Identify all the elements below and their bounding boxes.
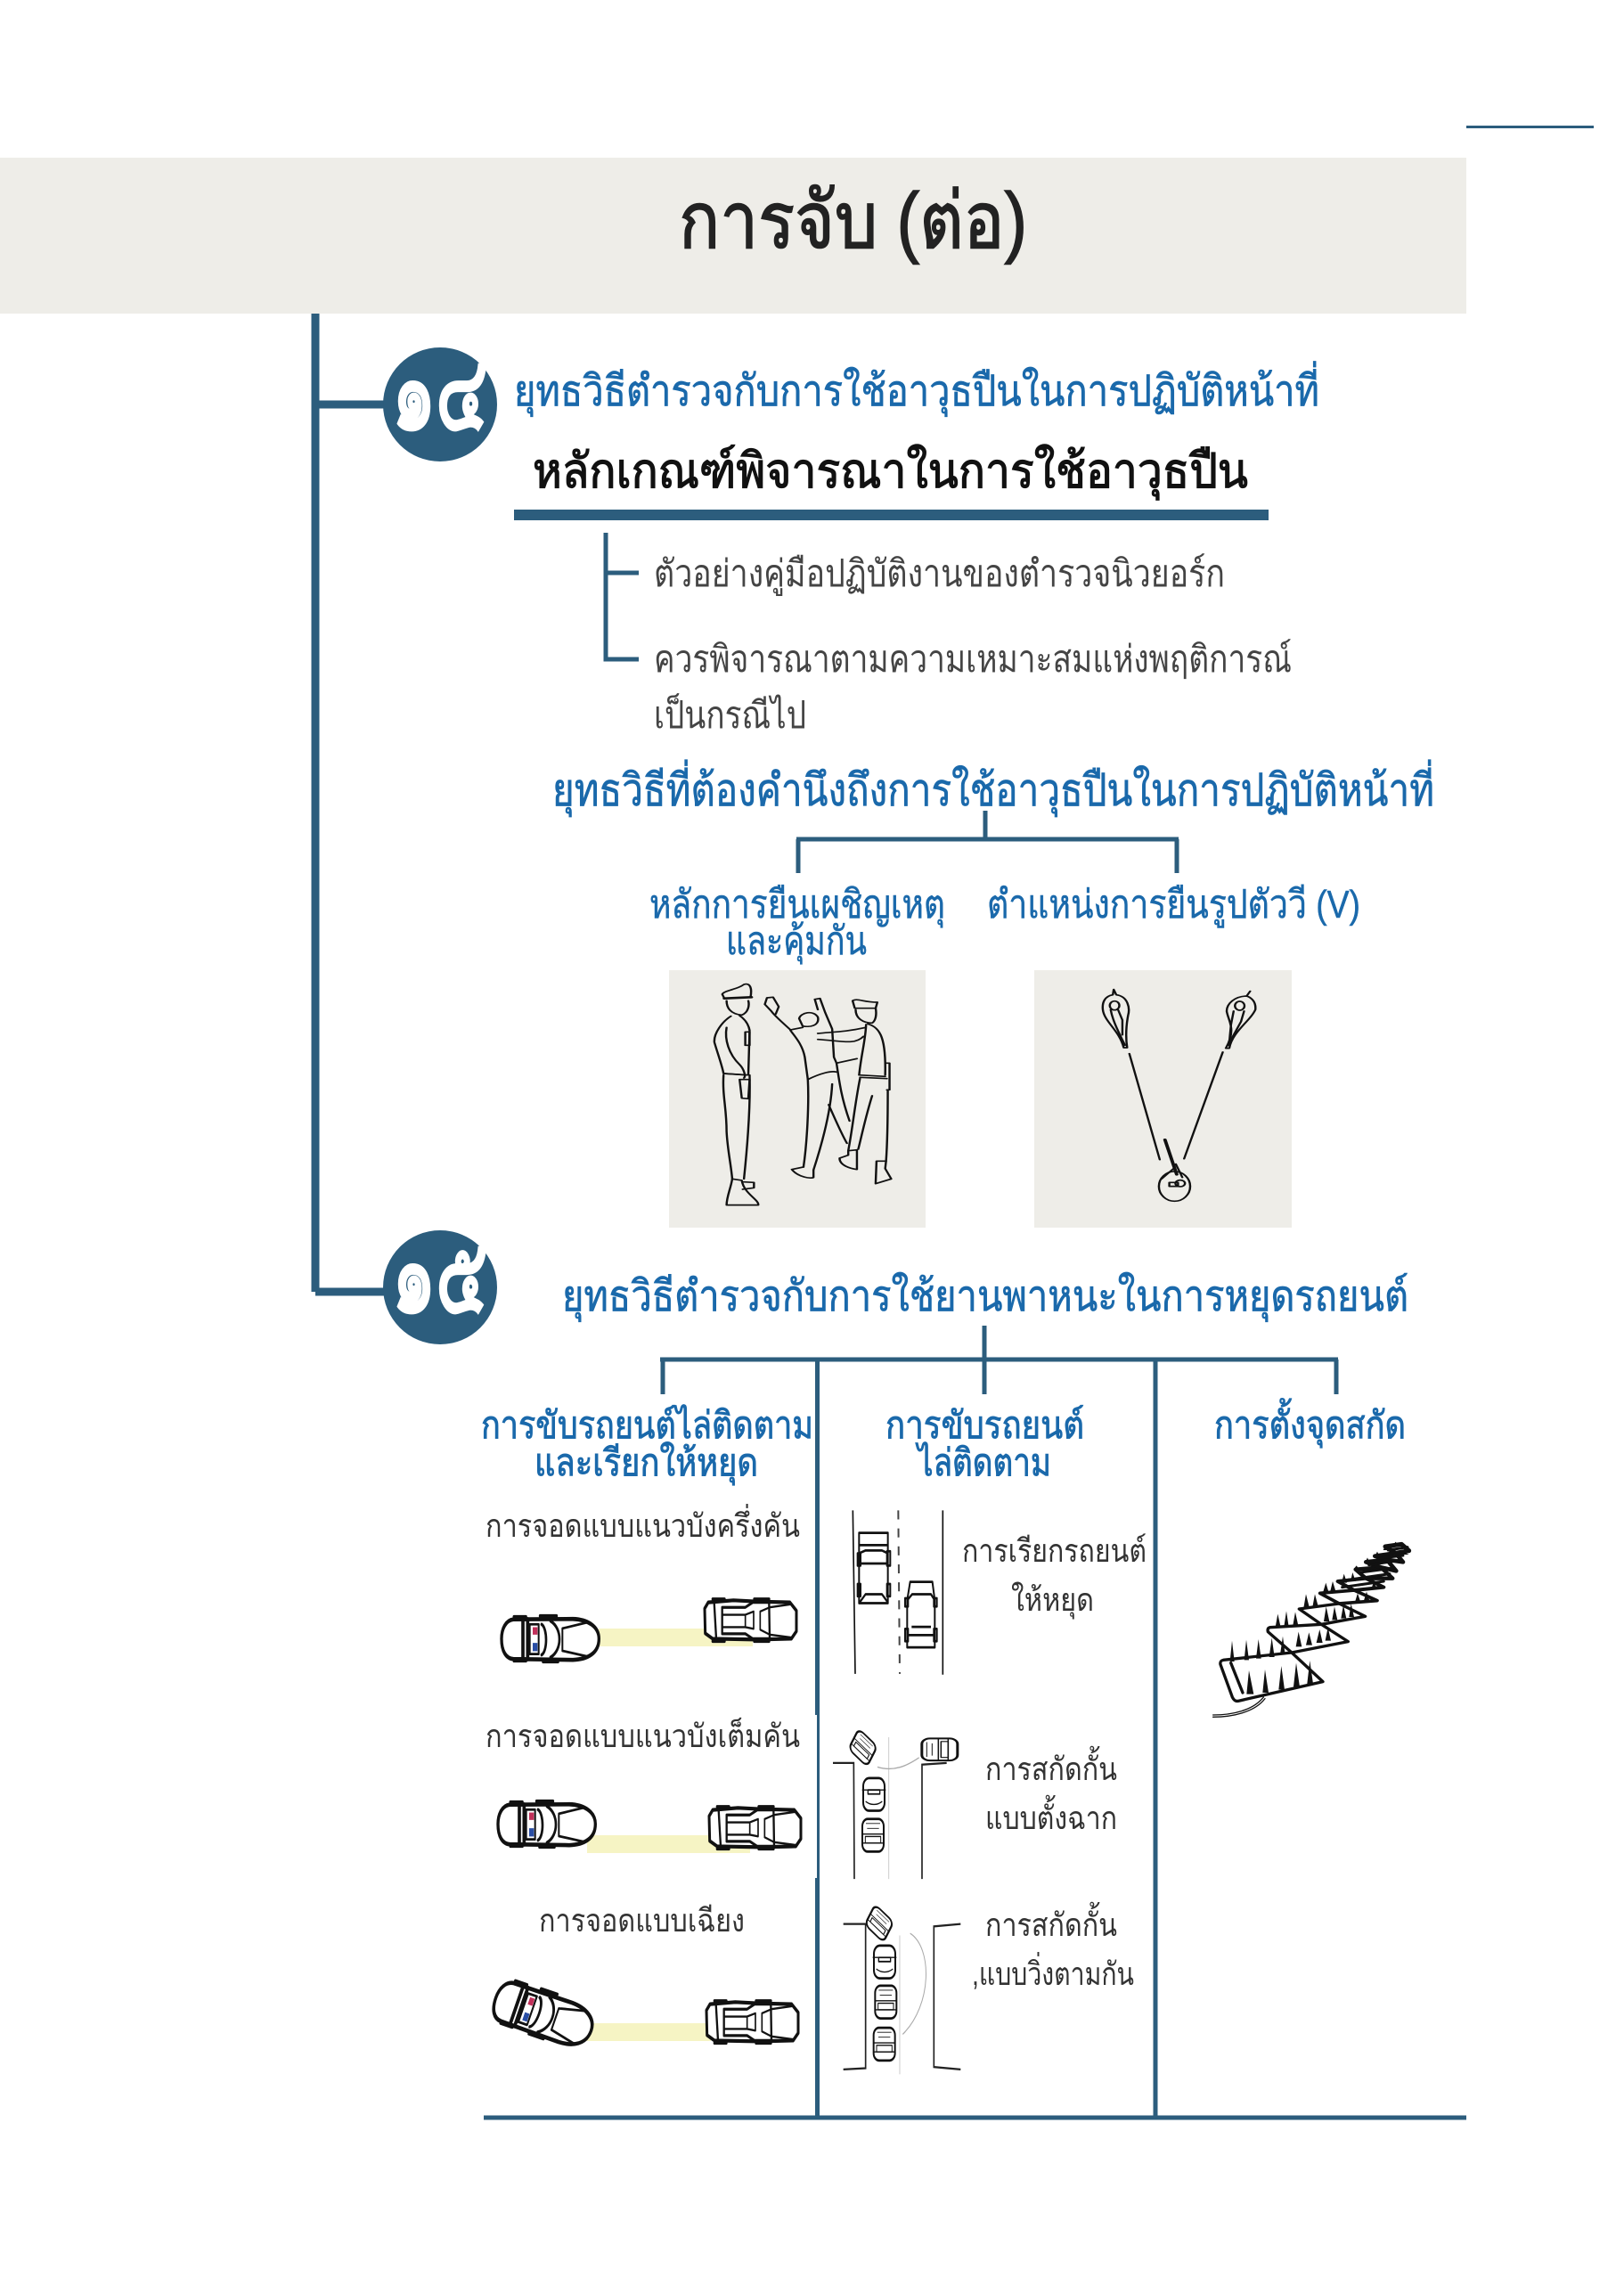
scene: rolling block diagram [844, 1904, 960, 2074]
badge 14 [383, 335, 497, 461]
tree connector 15 and column dividers [484, 1326, 1466, 2118]
label: rolling block [972, 1901, 1134, 1992]
icon: spike strip [1213, 1542, 1409, 1717]
label: confront and cover [649, 883, 945, 965]
main timeline connector [315, 314, 392, 1292]
text: NYPD manual example: ตัวอย่างคู่มือปฏิบัติงานของตำรวจนิวยอร์ก [654, 552, 1225, 596]
label: rolling block: การสกัดกั้น [985, 1901, 1117, 1943]
column heading: pursue and stop: และเรียกให้หยุด [535, 1441, 758, 1486]
badge 15 [383, 1218, 497, 1344]
label: call car to stop [962, 1532, 1147, 1620]
heading 14: ยุทธวิธีตำรวจกับการใช้อาวุธปืนในการปฏิบัติหน้าที่ [514, 361, 1319, 417]
badge 15: ๑๕ [392, 1218, 488, 1335]
text: consider by circumstance: เป็นกรณีไป [654, 693, 806, 736]
title band [0, 158, 1466, 314]
label: half block parking: การจอดแบบแนวบังครึ่งคัน [486, 1504, 800, 1544]
scene: pull over diagram [853, 1510, 943, 1675]
label: angled parking: การจอดแบบเฉียง [539, 1902, 745, 1939]
column heading: pursue and stop: การขับรถยนต์ไล่ติดตาม [481, 1404, 813, 1446]
cars: full block [498, 1801, 801, 1853]
car A [858, 1533, 890, 1604]
label: perpendicular block: แบบตั้งฉาก [985, 1794, 1117, 1836]
label: perpendicular block [985, 1745, 1117, 1836]
cars: angled [488, 1976, 798, 2053]
subheading: firearm criteria: หลักเกณฑ์พิจารณาในการใช้อาวุธปืน [533, 444, 1248, 501]
heading 15: ยุทธวิธีตำรวจกับการใช้ยานพาหนะในการหยุดรถยนต์ [562, 1271, 1408, 1322]
column heading: checkpoint: การตั้งจุดสกัด [1214, 1398, 1406, 1449]
column heading: pursuit [885, 1404, 1084, 1483]
badge 14: ๑๔ [392, 335, 488, 453]
heading: tactics to consider: ยุทธวิธีที่ต้องคำนึงถึงการใช้อาวุธปืนในการปฏิบัติหน้าที่ [552, 760, 1434, 817]
panel: police frisk illustration [669, 970, 926, 1228]
subheading rule [514, 510, 1269, 520]
column heading: pursuit: ไล่ติดตาม [915, 1441, 1051, 1483]
top right rule [1466, 126, 1594, 128]
label: perpendicular block: การสกัดกั้น [985, 1745, 1117, 1787]
officer right [1226, 992, 1255, 1049]
label: call car to stop: ให้หยุด [1011, 1581, 1094, 1620]
label: confront and cover: หลักการยืนเผชิญเหตุ [649, 883, 945, 928]
scene: perpendicular block diagram [833, 1728, 958, 1879]
label: V position: ตำแหน่งการยืนรูปตัววี (V) [987, 883, 1360, 928]
officer left [1103, 990, 1129, 1048]
label: confront and cover: และคุ้มกัน [726, 919, 867, 965]
text: consider by circumstance: ควรพิจารณาตามความเหมาะสมแห่งพฤติการณ์ [654, 638, 1292, 680]
label: full block parking: การจอดแบบแนวบังเต็มคัน [486, 1716, 800, 1754]
text: consider by circumstance [654, 638, 1292, 736]
label: rolling block: ,แบบวิ่งตามกัน [972, 1952, 1134, 1992]
panel: V formation illustration [1034, 970, 1292, 1228]
tree connector 14 [796, 811, 1179, 873]
title: การจับ (ต่อ) [679, 176, 1027, 265]
column heading: pursuit: การขับรถยนต์ [885, 1404, 1084, 1446]
label: call car to stop: การเรียกรถยนต์ [962, 1532, 1147, 1569]
column heading: pursue and stop [481, 1404, 813, 1486]
car B [905, 1582, 937, 1647]
cars: half block [502, 1599, 796, 1662]
bullet bracket [606, 533, 639, 659]
officer bottom with rifle [1159, 1139, 1190, 1201]
